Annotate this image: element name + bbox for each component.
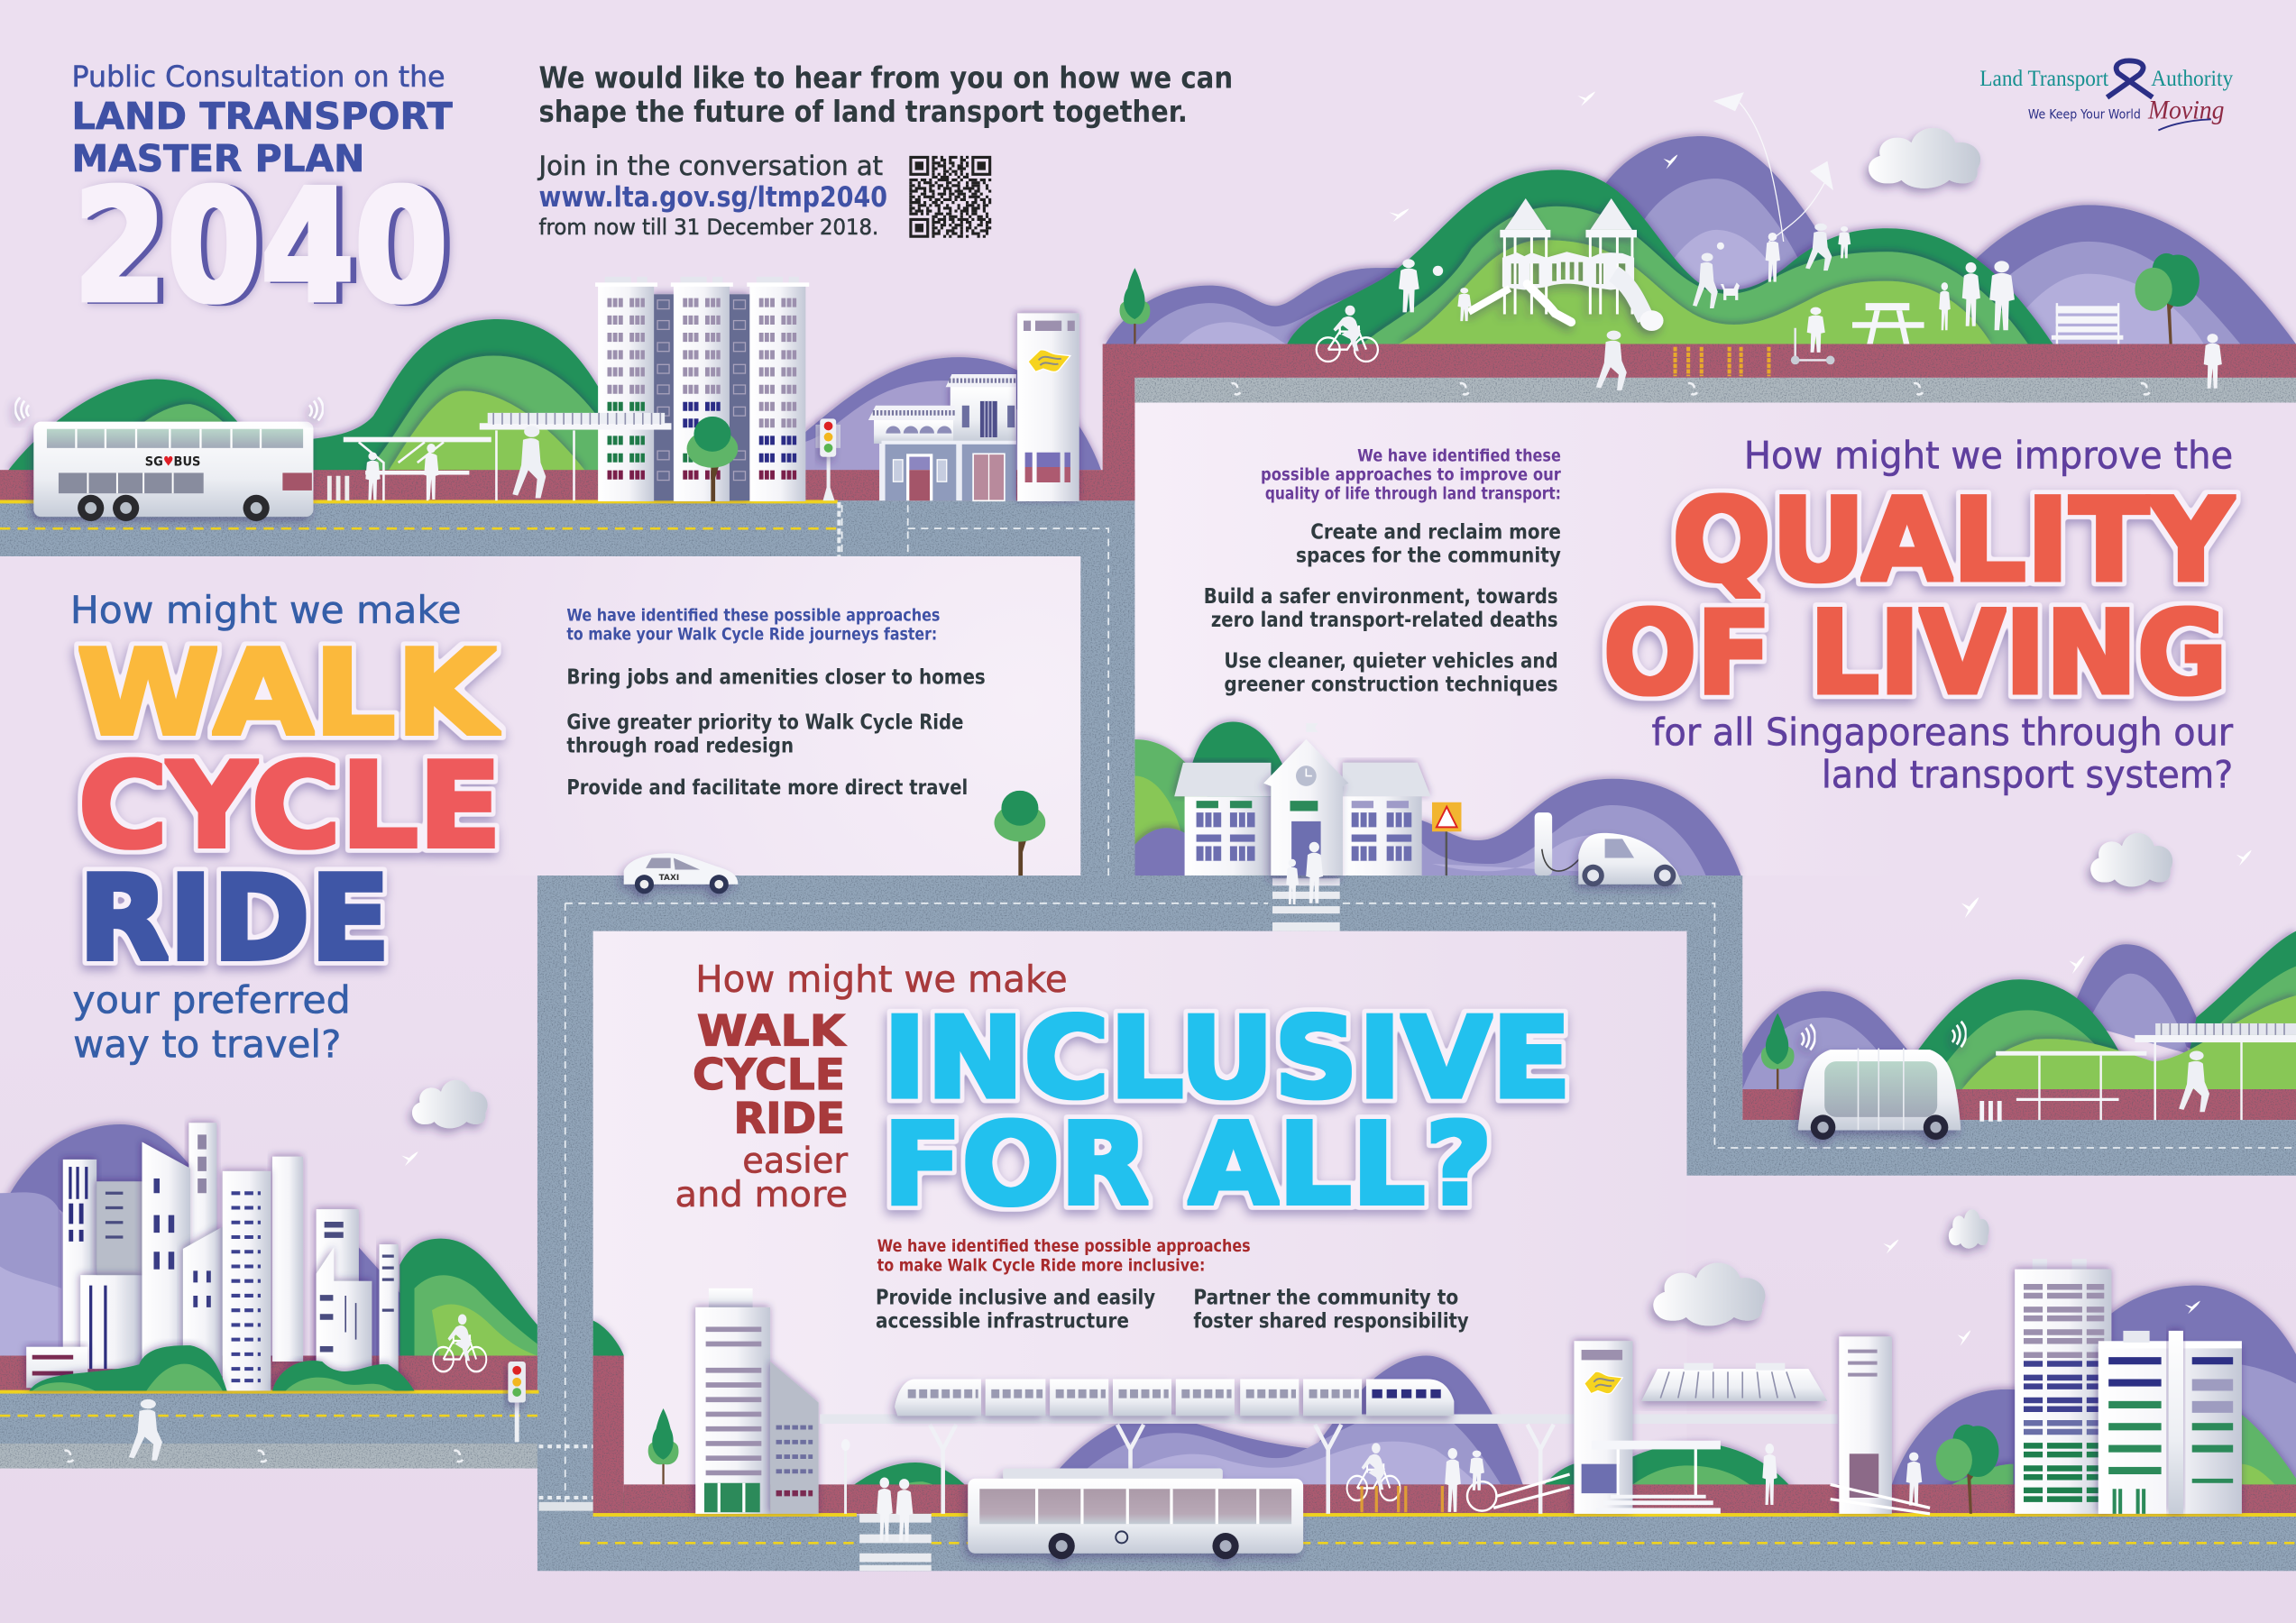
MRT logo (1028, 350, 1070, 371)
scene hills: left city (0, 1124, 624, 1356)
ground floor (881, 444, 1016, 500)
yellow path markings (1676, 347, 1768, 376)
road network (0, 344, 2296, 1571)
walk cycle ride approaches (566, 606, 986, 800)
cyclist: left (433, 1314, 486, 1371)
headline INCLUSIVE: INCLUSIVE (883, 994, 1571, 1123)
taxi: TAXI (659, 874, 679, 883)
logo wordmark: Land Transport (1979, 67, 2108, 91)
tree: park left (1120, 268, 1150, 344)
title year 2040: 2040 (73, 156, 448, 337)
left text panel: walk cycle ride (70, 589, 501, 1066)
scene hills: school (1134, 721, 1741, 876)
station MRT logo (1584, 1371, 1622, 1394)
walk cycle ride approaches: to make your Walk Cycle Ride journeys faster: (566, 626, 937, 645)
logo moving script: Moving (2147, 96, 2224, 125)
station entrance (1592, 1441, 1721, 1449)
right shelters (1979, 1023, 2296, 1122)
bottom headline: inclusive: How might we make (695, 958, 1068, 1001)
inclusive approaches: to make Walk Cycle Ride more inclusive: (877, 1256, 1205, 1275)
right headline: quality of living (1603, 435, 2235, 797)
headline WALK: WALK (77, 624, 500, 761)
intro text block (537, 60, 1233, 240)
lower flats: bottom right (2099, 1331, 2242, 1514)
person and stroller at ramp (1762, 1444, 1930, 1514)
tree by flats (687, 417, 738, 501)
picnic table (1852, 303, 1924, 344)
cloud: right panel (2090, 833, 2172, 886)
gap blocks between towers (653, 294, 749, 500)
inclusive approaches: Provide inclusive and easily (876, 1287, 1155, 1310)
quality of living approaches: Use cleaner, quieter vehicles and (1224, 649, 1558, 673)
pedestrian crossing: school (1272, 878, 1340, 931)
inclusive approaches: accessible infrastructure (876, 1310, 1129, 1334)
title line: land transport: LAND TRANSPORT (72, 95, 453, 138)
tiled roof left (868, 406, 955, 420)
panel: light backgrounds (0, 403, 2296, 1484)
right headline: quality of living: land transport system? (1822, 754, 2233, 797)
monorail train (895, 1379, 1454, 1416)
family (1939, 282, 1951, 330)
playground (1469, 198, 1664, 331)
intro text block: www.lta.gov.sg/ltmp2040 (539, 181, 887, 214)
autonomous shuttle (1798, 1049, 1961, 1140)
tree: near taxi (995, 791, 1045, 876)
left city bushes (29, 1345, 415, 1390)
cyclist on cycle path (1317, 306, 1378, 362)
MRT station (1575, 1341, 1827, 1514)
headline CYCLE: CYCLE (78, 737, 501, 874)
bottom headline: inclusive: easier (742, 1142, 849, 1182)
cloud: bottom big (1653, 1262, 1765, 1325)
quality of living approaches: We have identified these (1357, 446, 1561, 465)
wifi icons on bus (15, 398, 323, 420)
headline RIDE: RIDE (78, 850, 390, 987)
intro text block: from now till 31 December 2018. (539, 214, 878, 240)
quality of living approaches: Build a safer environment, towards (1204, 585, 1558, 609)
park people (1317, 224, 2222, 390)
station roof (1641, 1369, 1827, 1401)
small WALK CYCLE RIDE: RIDE (733, 1095, 845, 1144)
kites (1713, 92, 1833, 242)
school people (1286, 859, 1299, 904)
logo authority: Authority (2151, 67, 2234, 91)
inclusive approaches (876, 1237, 1469, 1334)
MRT tower top (1017, 313, 1079, 501)
left text panel: walk cycle ride: your preferred (72, 979, 351, 1022)
logo tagline: We Keep Your World (2028, 108, 2141, 123)
intro text block: shape the future of land transport together. (539, 95, 1188, 129)
elderly walker (2179, 1050, 2209, 1112)
traffic light (815, 418, 840, 500)
tree: bottom left (648, 1408, 679, 1484)
taxi (624, 853, 738, 894)
lamp post (841, 1439, 850, 1514)
footprints on left footpath (64, 1451, 463, 1462)
walker on left footpath (129, 1399, 162, 1461)
EV charger and car (1535, 812, 1683, 886)
quality of living approaches: Create and reclaim more (1310, 521, 1561, 545)
intro text block: We would like to hear from you on how we can (539, 60, 1233, 95)
scooter rider (1791, 307, 1835, 364)
trolley bus (968, 1469, 1303, 1559)
roads (0, 500, 2296, 1571)
dog (1721, 282, 1740, 300)
kite flyers (1766, 233, 1780, 282)
traffic light: left (508, 1362, 526, 1442)
title line: master plan: MASTER PLAN (72, 137, 364, 180)
tree: shuttle area (1761, 1013, 1795, 1089)
inclusive approaches: Partner the community to (1193, 1287, 1458, 1310)
small WALK CYCLE RIDE: WALK (697, 1006, 847, 1056)
road markings (0, 500, 2296, 1543)
cloud: left (412, 1080, 488, 1128)
logo ribbon icon (2108, 60, 2153, 97)
quality of living approaches: possible approaches to improve our (1261, 466, 1562, 485)
scene hills: right shuttle area (1742, 931, 2296, 1089)
birds (401, 92, 2252, 1346)
left city skyscrapers (26, 1123, 399, 1390)
double decker bus (33, 422, 313, 521)
walk cycle ride approaches: We have identified these possible approaches (566, 606, 940, 625)
walk cycle ride approaches: Bring jobs and amenities closer to homes (566, 665, 986, 689)
scene hills: top left (7, 319, 1101, 472)
left upper storey (874, 420, 953, 444)
monorail track and pillars (820, 1414, 1838, 1514)
headline OF LIVING: OF LIVING (1603, 586, 2227, 720)
footpaths (0, 378, 2296, 1469)
racket child (1693, 252, 1718, 308)
tower 1 (595, 277, 657, 501)
HDB tower blocks (595, 277, 809, 501)
bus shelters (329, 413, 671, 500)
title line: public consultation: Public Consultation on the (72, 61, 445, 94)
tree: park right (2135, 253, 2200, 344)
quality of living approaches: zero land transport-related deaths (1211, 609, 1558, 632)
quality of living approaches: quality of life through land transport: (1265, 485, 1561, 504)
inclusive approaches: We have identified these possible approaches (877, 1237, 1251, 1256)
left text panel: walk cycle ride: How might we make (70, 589, 461, 632)
right upper storey (951, 387, 1016, 442)
bottom headline: inclusive: and more (675, 1175, 848, 1215)
tree: bottom right (1936, 1425, 1998, 1514)
second station tower (1839, 1336, 1892, 1514)
walk cycle ride approaches: through road redesign (566, 735, 794, 758)
quality of living approaches: spaces for the community (1296, 544, 1561, 567)
scene hills: bottom (593, 1286, 2296, 1514)
gap windows (657, 300, 745, 481)
station tower (1575, 1341, 1632, 1514)
right headline: quality of living: How might we improve the (1744, 435, 2233, 478)
tiled roof right (946, 374, 1016, 387)
inclusive approaches: foster shared responsibility (1193, 1310, 1469, 1334)
pedestrian crossing: bottom (859, 1514, 932, 1571)
logo swoosh (2158, 119, 2211, 131)
walk cycle ride approaches: Provide and facilitate more direct travel (566, 776, 968, 800)
school (1174, 723, 1430, 904)
cloud: top right (1869, 128, 1980, 188)
QR code (909, 156, 991, 238)
small WALK CYCLE RIDE: CYCLE (693, 1050, 845, 1100)
park bench (2052, 303, 2123, 344)
ball player (1399, 259, 1419, 312)
quality of living approaches (1204, 446, 1562, 696)
intro text block: Join in the conversation at (537, 151, 883, 181)
bus branding: SG♥BUS (145, 454, 200, 469)
walker on path (2204, 334, 2222, 389)
headline FOR ALL: FOR ALL? (883, 1100, 1492, 1231)
people on crossing (877, 1477, 913, 1542)
shophouses (868, 374, 1016, 500)
runner (1596, 331, 1627, 390)
headline QUALITY: QUALITY (1672, 473, 2235, 607)
footprints on top footpath (1232, 383, 2150, 394)
small child (1457, 288, 1472, 321)
LTA logo (1979, 60, 2234, 131)
bottom headline: inclusive (675, 958, 1571, 1231)
school sign (1432, 802, 1461, 876)
cycle paths (0, 344, 2296, 1514)
tower 3 (747, 277, 809, 501)
right headline: quality of living: for all Singaporeans through our (1652, 711, 2234, 754)
wifi icons on shuttle (1802, 1022, 1966, 1050)
walk cycle ride approaches: Give greater priority to Walk Cycle Ride (566, 711, 963, 735)
office tower: bottom left (695, 1288, 819, 1514)
quality of living approaches: greener construction techniques (1224, 673, 1558, 696)
people at shelter (365, 426, 546, 500)
tower 2 (671, 277, 733, 501)
cloud: bottom small (1949, 1209, 1989, 1249)
small WALK CYCLE RIDE (693, 1006, 847, 1144)
scene hills: top right park (1106, 136, 2296, 344)
left text panel: walk cycle ride: way to travel? (73, 1022, 341, 1066)
tall flats: bottom right (2015, 1259, 2111, 1514)
cyclist and wheelchair group (1347, 1443, 1570, 1512)
title block (72, 61, 453, 337)
